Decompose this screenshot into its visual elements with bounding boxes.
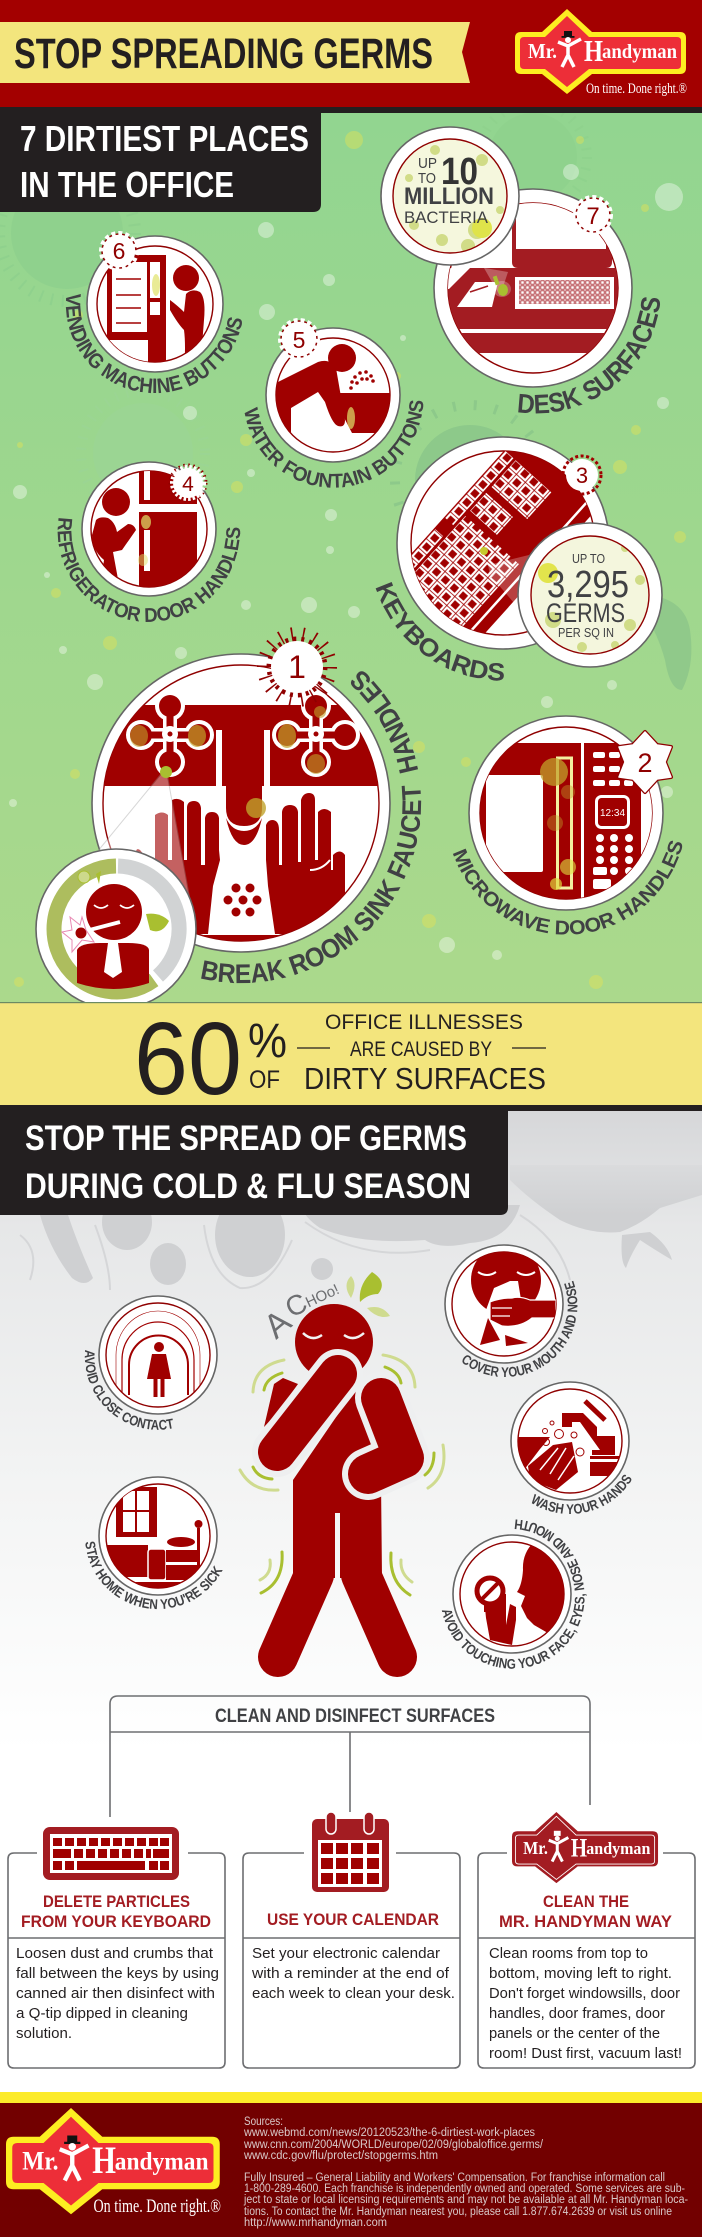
panel: green office background	[0, 103, 702, 1003]
germ blobs	[0, 103, 691, 989]
panel: grey section background	[0, 1105, 702, 1751]
panel: 60% statistic	[0, 1001, 702, 1116]
panel: clean and disinfect surfaces	[110, 1696, 590, 1817]
panel: 60% statistic: OF	[249, 1066, 280, 1094]
panel: 60% statistic: DIRTY SURFACES	[304, 1061, 546, 1096]
figure: sneezing person	[240, 1272, 444, 1657]
panel: 60% statistic: 60	[134, 1001, 242, 1116]
text block: keyboard tip	[16, 1945, 219, 2042]
display text: 12:34	[600, 808, 625, 819]
panel: clean the Mr. Handyman way: CLEAN THE	[543, 1892, 629, 1911]
label: vending machine buttons: VENDING MACHINE BUTTONS	[66, 294, 242, 394]
text block: sources: www.webmd.com/news/20120523/the-6-dirtiest-work-places	[243, 2127, 535, 2139]
icon: calendar	[312, 1812, 389, 1892]
text block: cleaning tip: room! Dust first, vacuum last!	[489, 2045, 682, 2062]
badge: 1	[264, 634, 330, 700]
badge: 3: 3	[576, 463, 588, 488]
text block: calendar tip: each week to clean your desk.	[252, 1985, 455, 2002]
callout: up to 3,295 germs per sq in: 3,295	[547, 564, 629, 606]
label: stay home: STAY HOME WHEN YOU'RE SICK	[85, 1542, 223, 1610]
panel: use your calendar	[243, 1812, 460, 2068]
text block: cleaning tip: bottom, moving left to right.	[489, 1965, 672, 1982]
panel: 7 desk surfaces	[433, 188, 660, 414]
logo: Mr. Handyman footer	[6, 2108, 221, 2217]
text block: legal: http://www.mrhandyman.com	[244, 2217, 387, 2229]
callout: up to 10 million bacteria: TO	[418, 170, 436, 187]
label: cover mouth: COVER YOUR MOUTH AND NOSE	[462, 1280, 578, 1377]
heading: stop the spread of germs: STOP THE SPREAD OF GERMS	[25, 1119, 467, 1158]
badge: 4	[170, 465, 206, 501]
logo: Mr. Handyman header: andyman	[602, 41, 677, 63]
text block: calendar tip: with a reminder at the end of	[251, 1965, 450, 1982]
ribbon: title banner	[0, 22, 470, 83]
badge: 2: 2	[637, 748, 653, 778]
logo: Mr. Handyman header	[515, 9, 687, 97]
heading: 7 dirtiest places: IN THE OFFICE	[20, 164, 234, 205]
badge: 3	[563, 456, 601, 494]
text block: sources: www.cdc.gov/flu/protect/stopgerms.htm	[243, 2150, 438, 2162]
label: avoid touching: AVOID TOUCHING YOUR FACE, EYES, NOSE AND MOUTH	[442, 1519, 587, 1669]
logo: Mr. Handyman header: H	[584, 33, 603, 68]
panel: 5 water fountain buttons	[244, 318, 424, 488]
icon: avoid close contact	[84, 1295, 218, 1430]
label: water fountain buttons: WATER FOUNTAIN BUTTONS	[244, 400, 424, 488]
panel: delete particles from keyboard: DELETE PARTICLES	[43, 1892, 190, 1911]
text block: sources: Sources:	[244, 2116, 283, 2128]
head	[295, 1304, 373, 1380]
panel: 3 keyboards	[376, 436, 608, 681]
text block: cleaning tip: Don't forget windowsills, door	[489, 1985, 680, 2002]
panel: delete particles from keyboard	[8, 1827, 225, 2068]
callout: up to 10 million bacteria: 10	[441, 151, 478, 193]
text block: calendar tip	[251, 1945, 455, 2002]
callout: up to 10 million bacteria: MILLION	[404, 183, 494, 210]
callout: sick office worker	[36, 849, 196, 1009]
text block: legal: Fully Insured – General Liability and Workers' Compensation. For franchise information call	[244, 2172, 665, 2184]
heading: 7 dirtiest places: 7 DIRTIEST PLACES	[20, 118, 309, 159]
callout: up to 3,295 germs per sq in: PER SQ IN	[558, 625, 614, 640]
back arm	[264, 1378, 298, 1427]
badge: 7: 7	[586, 203, 600, 230]
arm on stomach	[368, 1398, 404, 1474]
text block: keyboard tip: fall between the keys by using	[16, 1965, 219, 1982]
panel: 6 vending machine buttons	[66, 231, 242, 394]
callout: up to 3,295 germs per sq in	[518, 523, 662, 667]
logo: Mr. Handyman footer: Mr.	[22, 2146, 58, 2175]
panel: header band	[0, 0, 702, 113]
badge: 1: 1	[288, 649, 306, 685]
shake marks	[240, 1355, 444, 1595]
icon: left faucet handle	[126, 691, 214, 777]
heading: stop the spread of germs	[0, 1105, 508, 1215]
sneeze text: A	[257, 1302, 299, 1346]
badge: 5	[280, 320, 318, 358]
heading: stop the spread of germs: DURING COLD & FLU SEASON	[25, 1167, 471, 1206]
callout: up to 10 million bacteria: UP	[418, 155, 437, 172]
label: break room sink faucet handles: BREAK ROOM SINK FAUCET HANDLES	[201, 671, 422, 984]
icon: keyboard	[43, 1827, 179, 1880]
text block: sources	[243, 2116, 544, 2162]
callout: up to 3,295 germs per sq in: UP TO	[572, 551, 605, 566]
torso and legs	[278, 1385, 397, 1657]
label: refrigerator door handles: REFRIGERATOR DOOR HANDLES	[58, 518, 240, 622]
icon: avoid touching face	[442, 1519, 587, 1669]
text block: calendar tip: Set your electronic calendar	[252, 1945, 440, 1962]
callout: up to 3,295 germs per sq in: GERMS	[546, 598, 625, 628]
label: keyboards: KEYBOARDS	[376, 582, 504, 681]
grey germ silhouettes	[40, 1165, 702, 1285]
label: microwave door handles: MICROWAVE DOOR HANDLES	[453, 840, 682, 934]
logo: Mr. Handyman footer: andyman	[115, 2148, 209, 2175]
callout: up to 10 million bacteria	[381, 127, 519, 265]
panel: 60% statistic: OFFICE ILLNESSES	[325, 1011, 523, 1034]
heading: 7 dirtiest places	[0, 107, 321, 212]
logo: Mr. Handyman red: Mr.	[523, 1838, 548, 1858]
label: wash hands: WASH YOUR HANDS	[532, 1474, 632, 1514]
badge: 4: 4	[182, 473, 194, 496]
magnifier cone	[70, 768, 190, 900]
panel: 2 microwave door handles	[453, 715, 682, 934]
panel: clean the Mr. Handyman way	[478, 1812, 695, 2068]
text block: keyboard tip: solution.	[16, 2025, 72, 2042]
text block: cleaning tip: handles, door frames, door	[489, 2005, 665, 2022]
text block: keyboard tip: canned air then disinfect with	[16, 1985, 215, 2002]
panel: 4 refrigerator door handles	[58, 461, 240, 622]
text block: cleaning tip: Clean rooms from top to	[489, 1945, 648, 1962]
label: desk surfaces: DESK SURFACES	[518, 297, 660, 414]
panel: clean and disinfect surfaces: CLEAN AND DISINFECT SURFACES	[215, 1706, 495, 1727]
icon: right faucet handle	[272, 691, 360, 777]
badge: 5: 5	[293, 327, 305, 353]
label: avoid close contact: AVOID CLOSE CONTACT	[84, 1350, 173, 1430]
text block: sources: www.cnn.com/2004/WORLD/europe/02/09/globaloffice.germs/	[243, 2139, 544, 2151]
logo: Mr. Handyman footer: H	[92, 2139, 116, 2182]
text block: cleaning tip: panels or the center of the	[489, 2025, 660, 2042]
icon: cover your mouth and nose	[444, 1244, 578, 1377]
logo: Mr. Handyman red: H	[571, 1832, 587, 1862]
arm to nose	[277, 1374, 338, 1452]
badge: 7	[575, 197, 611, 233]
logo: Mr. Handyman red	[512, 1812, 658, 1883]
logo: Mr. Handyman red: andyman	[586, 1839, 651, 1858]
text block: keyboard tip: a Q-tip dipped in cleaning	[16, 2005, 188, 2022]
logo: Mr. Handyman header: Mr.	[528, 39, 557, 63]
logo: Mr. Handyman footer: On time. Done right.®	[94, 2196, 221, 2217]
panel: 60% statistic: %	[248, 1015, 287, 1068]
panel: delete particles from keyboard: FROM YOUR KEYBOARD	[21, 1912, 211, 1931]
icon: wash your hands	[510, 1381, 632, 1514]
icon: stay home when sick	[85, 1476, 223, 1610]
text block: keyboard tip: Loosen dust and crumbs that	[16, 1945, 214, 1962]
panel: 60% statistic: ARE CAUSED BY	[350, 1038, 492, 1061]
sneeze text: choo: C	[280, 1287, 312, 1323]
text block: cleaning tip	[489, 1945, 682, 2062]
sneeze text: choo: HOo!	[303, 1281, 342, 1311]
badge: 6: 6	[113, 238, 125, 264]
badge: 6	[101, 233, 137, 269]
callout: up to 10 million bacteria: BACTERIA	[404, 208, 489, 227]
panel: use your calendar: USE YOUR CALENDAR	[267, 1910, 439, 1929]
panel: clean the Mr. Handyman way: MR. HANDYMAN WAY	[499, 1912, 673, 1931]
title: STOP SPREADING GERMS	[14, 30, 433, 78]
panel: footer	[0, 2092, 702, 2237]
badge: 2	[619, 732, 671, 792]
panel: 1 break room sink faucet handles	[91, 627, 422, 984]
sneeze drops	[346, 1272, 390, 1317]
text block: legal	[243, 2172, 688, 2229]
